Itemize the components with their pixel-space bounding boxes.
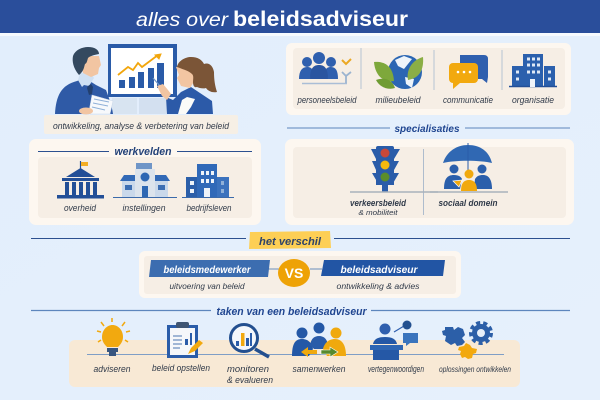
heading: specialisaties: specialisaties: [394, 123, 460, 135]
beleidsadviseur: [321, 260, 445, 291]
beleidsmedewerker: uitvoering van beleid: [170, 282, 245, 291]
icon: organisatie: [509, 54, 557, 87]
VS badge: [278, 259, 310, 287]
icon: bedrijfsleven: [182, 164, 234, 198]
icon: monitoren: [230, 324, 269, 357]
caption: ontwikkeling, analyse en verbetering: ontwikkeling, analyse & verbetering van beleid: [53, 121, 230, 132]
heading: taken van een beleidsadviseur: taken van een beleidsadviseur: [216, 306, 367, 318]
man: [55, 47, 113, 114]
panel: verkeersbeleid en sociaal domein: [285, 139, 574, 225]
caption: ontwikkeling, analyse en verbetering: [44, 115, 238, 134]
label: monitoren & evalueren: monitoren: [227, 364, 269, 374]
icon: paraplu met mensen: [430, 143, 508, 192]
beleidsadviseur: ontwikkeling & advies: [336, 282, 420, 291]
panel: vergelijking: [139, 251, 461, 298]
panel: specialisatie-onderwerpen: [286, 43, 571, 115]
icon: samenwerken: [292, 322, 346, 357]
title: alles over: [136, 10, 229, 31]
panel: werkvelden: [29, 139, 261, 225]
label: overheid: overheid: [64, 203, 97, 214]
label: sociaal domein: sociaal domein: [438, 198, 498, 209]
icon: stoplicht: [350, 146, 438, 192]
icon: personeelsbeleid: [299, 52, 351, 84]
label: organisatie: organisatie: [512, 95, 554, 105]
icon: communicatie: [449, 55, 488, 89]
title: beleidsadviseur: [233, 8, 408, 31]
label: oplossingen ontwikkelen: oplossingen ontwikkelen: [439, 365, 511, 374]
label: personeelsbeleid: personeelsbeleid: [297, 95, 357, 105]
label: verkeersbeleid & mobiliteit: verkeersbeleid: [350, 198, 406, 209]
label: communicatie: communicatie: [443, 95, 493, 105]
heading: het verschil: [31, 231, 570, 249]
icon: instellingen: [113, 163, 177, 198]
icon: milieubeleid: [374, 55, 423, 89]
label: beleid opstellen: beleid opstellen: [152, 363, 210, 373]
beleidsadviseur: beleidsadviseur: [340, 265, 419, 276]
label: adviseren: adviseren: [94, 364, 130, 374]
monitor with chart: [108, 44, 177, 114]
label: monitoren & evalueren: [227, 364, 273, 385]
icon: vertegenwoordigen: [370, 320, 418, 360]
beleidsmedewerker: [149, 260, 270, 291]
label: vertegenwoordigen: vertegenwoordigen: [368, 364, 424, 374]
icon: overheid: [57, 161, 104, 198]
woman: [153, 57, 217, 114]
VS badge: VS: [285, 265, 303, 281]
icon: beleid opstellen: [167, 322, 203, 358]
heading: werkvelden: werkvelden: [114, 146, 172, 158]
label: verkeersbeleid & mobiliteit: & mobiliteit: [358, 208, 398, 217]
label: verkeersbeleid & mobiliteit: [350, 198, 406, 217]
icon: adviseren: [97, 318, 130, 356]
beleidsmedewerker: beleidsmedewerker: [164, 265, 252, 276]
label: bedrijfsleven: bedrijfsleven: [186, 203, 232, 214]
icon: oplossingen ontwikkelen: [442, 323, 491, 359]
heading: het verschil: het verschil: [259, 236, 322, 248]
label: samenwerken: samenwerken: [292, 364, 346, 374]
header banner: [0, 0, 600, 36]
illustration: two colleagues at a monitor: [55, 44, 217, 114]
label: monitoren & evalueren: & evalueren: [227, 375, 273, 385]
title: [136, 8, 408, 31]
panel: taken: [69, 318, 520, 387]
label: instellingen: instellingen: [122, 203, 166, 214]
label: milieubeleid: milieubeleid: [376, 95, 421, 105]
